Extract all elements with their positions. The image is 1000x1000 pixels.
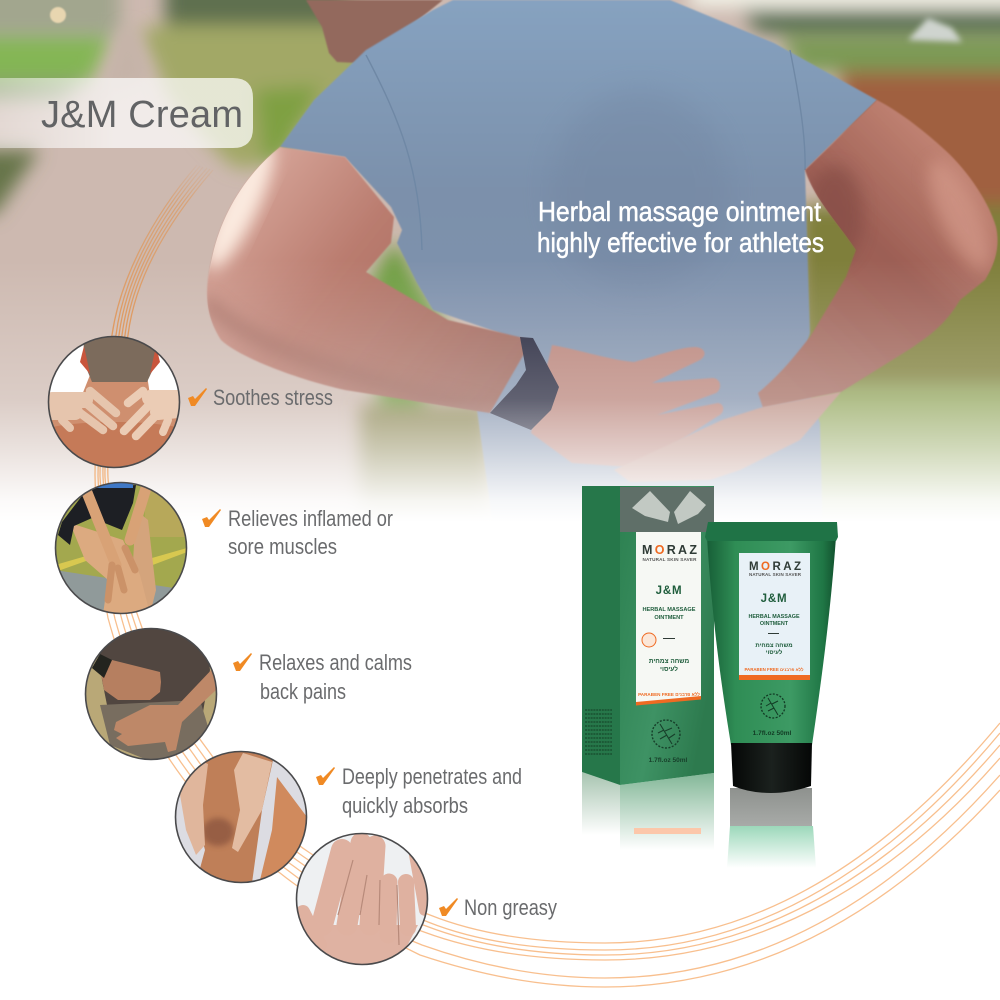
park background [56,484,186,588]
left arm lighting [208,147,367,380]
man's t-shirt [280,0,877,540]
box label text: MORAZ [642,543,697,557]
blue top [97,483,133,488]
tube label [739,553,810,680]
box label text: משחה צמחית [649,658,689,665]
tube label text: J&M [761,593,787,605]
box reflected orange band [634,828,701,834]
headline line 1: Herbal massage ointment [538,196,821,227]
benefit text: Non greasy [464,895,557,920]
benefit: non greasy [439,895,557,920]
tube body [707,537,836,745]
finger gaps [338,860,399,945]
box side panel [582,486,620,785]
product tube [705,522,838,793]
benefit text line 1: Deeply penetrates and [342,764,522,789]
back leg [133,516,156,607]
box side reflection [582,772,620,835]
check icon [439,898,458,916]
tube label dash [768,633,779,634]
badge background [0,78,253,148]
man's head [306,0,443,63]
man's hand on left side of back [531,345,723,467]
tube cap [731,743,812,793]
box side small text [585,710,612,754]
bokeh lights [50,7,66,23]
check icon [233,653,252,671]
landscape base [0,0,1000,540]
box label text: NATURAL SKIN SAVER [642,557,697,562]
ears [80,346,160,374]
tube label text [744,561,804,672]
tube crimp top [705,522,838,541]
benefit: relaxes and calms back pains [233,650,412,704]
road far section [100,28,150,100]
circle photo: hands on knee [175,751,307,883]
lower arm and hand [114,665,216,752]
box label text: OINTMENT [654,615,684,621]
benefit: deeply penetrates and quickly absorbs [316,764,522,818]
neck and back [52,376,177,427]
box label text [638,543,700,697]
white fade into page [0,260,1000,522]
tube label text: MORAZ [749,561,801,573]
man's left arm [207,147,532,413]
circle outlines [48,336,428,964]
headline [537,196,824,258]
box label text: PARABEN FREE ללא פרבנים [638,692,700,697]
circle photo: hands on knee of runner [55,482,190,614]
knee shadow [202,818,234,846]
box volume text: 1.7fl.oz 50ml [649,757,688,764]
box label text: J&M [656,585,682,597]
circle photo: hands on neck [48,336,180,470]
box photo hands [632,491,706,524]
background photo: man holding lower back on a country road [0,0,1000,541]
tube herb seal [761,694,785,718]
palm [310,925,418,970]
shirt shading [550,90,730,290]
product reflection [582,772,816,868]
smart watch [490,337,559,430]
tube volume text: 1.7fl.oz 50ml [753,730,792,737]
right hand [124,391,178,436]
tube body reflection [727,826,816,868]
benefit text: Soothes stress [213,385,333,410]
box front panel [620,486,714,785]
benefit text line 1: Relieves inflamed or [228,506,393,531]
fingers [303,843,425,945]
background [297,833,429,965]
benefit text line 2: sore muscles [228,534,337,559]
shirt sleeve seams [366,50,805,250]
title text: J&M Cream [41,94,243,136]
tube label text: OINTMENT [760,621,789,627]
box front reflection [620,773,714,850]
box label orange band [636,696,701,706]
upper hand [100,660,161,700]
box label dash [663,638,675,639]
box herb seal [652,720,680,748]
distant house [908,18,962,42]
thigh and shin [73,525,132,613]
far leg [260,777,307,880]
tube cap reflection [730,788,812,828]
headline line 2: highly effective for athletes [537,227,824,258]
box label sun icon [642,633,656,647]
tube label text: PARABEN FREE ללא פרבנים [744,667,804,672]
tube label text: משחה צמחית [755,643,793,649]
trousers [100,701,208,759]
tube label orange band [739,675,810,680]
title badge [0,78,253,148]
circle photo: open palm [297,833,429,970]
arms and hands [86,488,146,600]
box label [636,532,701,705]
knee skin [190,751,275,883]
dark shirt [100,629,210,711]
shorts [58,485,136,545]
benefit: soothes stress [188,385,333,410]
box label text: HERBAL MASSAGE [642,607,696,613]
tube label text: HERBAL MASSAGE [748,614,800,620]
right arm lighting [810,162,996,272]
benefit text line 1: Relaxes and calms [259,650,412,675]
man's hand on right side of back [614,392,841,482]
watch [92,654,112,678]
check icon [316,767,335,785]
right hand [232,753,272,852]
product box [582,486,714,785]
check icon [202,509,221,527]
background [175,751,307,883]
decorative orange arcs [95,165,1000,987]
background [86,654,216,758]
box photo strip [620,487,714,532]
left hand [180,758,208,855]
man's right arm [758,100,998,408]
benefit text line 2: back pains [260,679,346,704]
tube label text: NATURAL SKIN SAVER [749,572,802,577]
box label text: לעיסוי [660,665,678,673]
benefit text line 2: quickly absorbs [342,793,468,818]
tube label text: לעיסוי [766,648,783,656]
circle photo: hands on lower back [85,628,217,765]
lower back [54,422,174,467]
landscape colour areas [0,0,1000,540]
head hair [83,336,157,382]
benefit: relieves inflamed or sore muscles [202,506,393,559]
check icon [188,388,207,406]
left hand [52,391,116,430]
